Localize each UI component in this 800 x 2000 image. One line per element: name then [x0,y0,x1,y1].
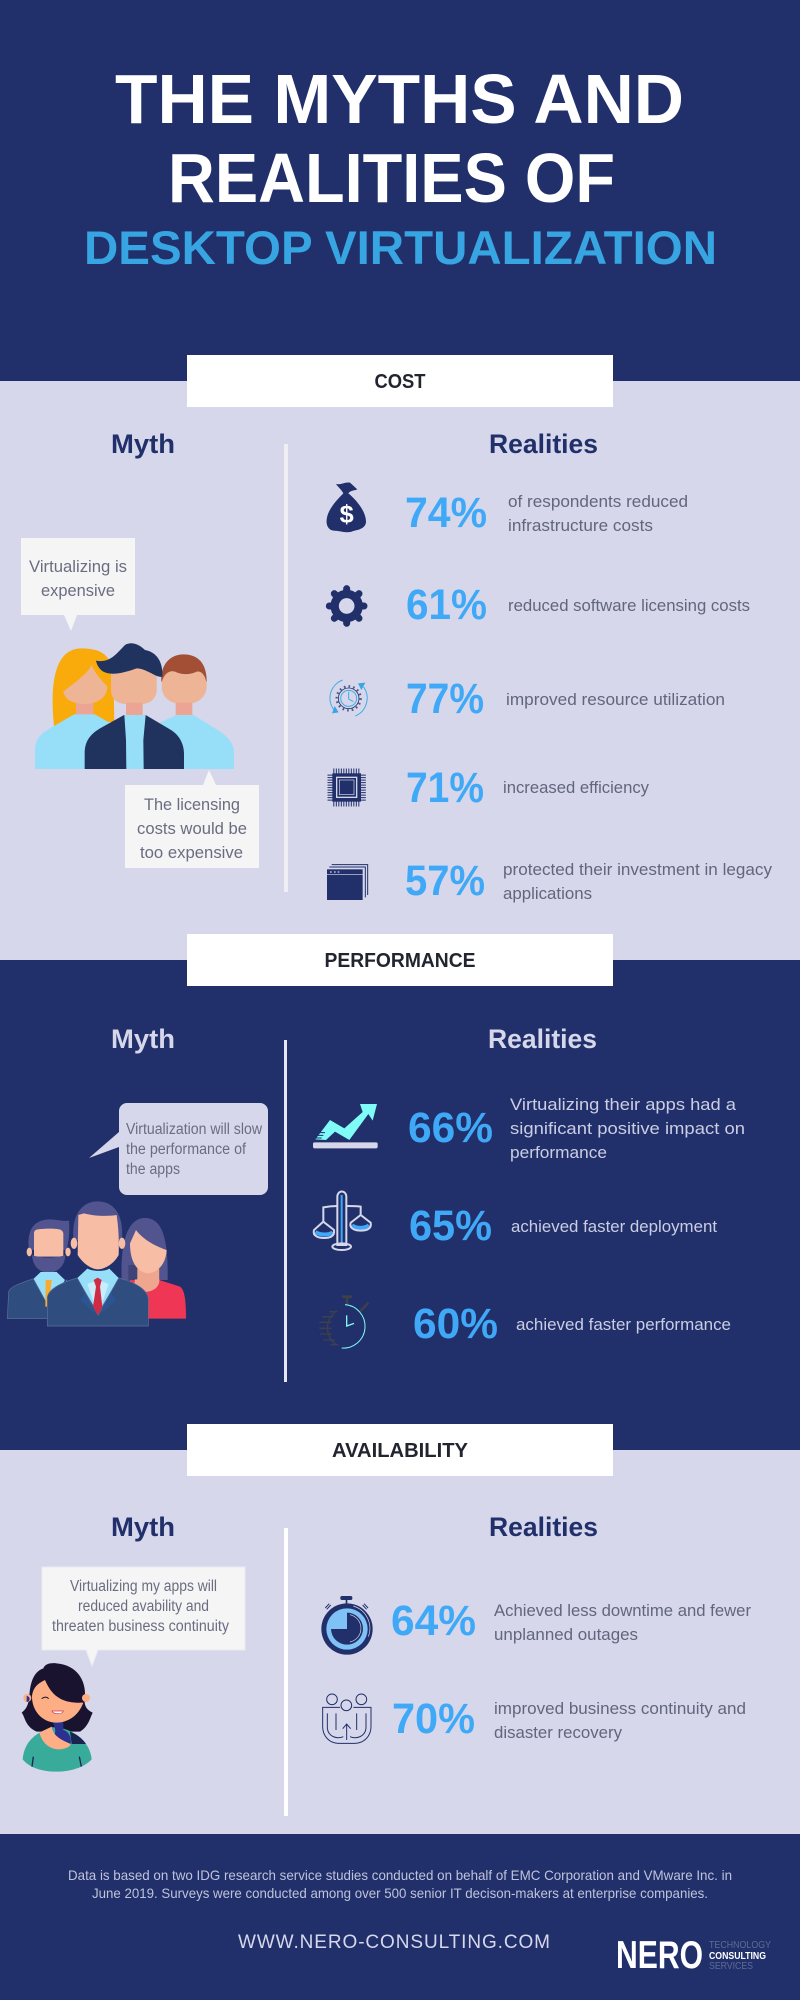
illustration: three colleagues [35,643,234,769]
callout: virtualizing is expensive: Virtualizing is [29,557,127,576]
callout: slow performance: the performance of [126,1141,247,1158]
stat: 77%: 77% [406,675,484,723]
stat: 60% [413,1300,731,1348]
stat: 61% [406,581,750,629]
stat: 70% [392,1695,746,1743]
stat: 66%: significant positive impact on [510,1119,745,1138]
title: DESKTOP VIRTUALIZATION [84,221,717,274]
heading: availability: AVAILABILITY [332,1440,469,1462]
panel: footer [0,1834,800,2000]
stat: 61%: 61% [406,581,487,629]
stat: 61%: reduced software licensing costs [508,596,750,615]
callout: reduced availability [42,1567,245,1666]
stat: 57% [405,857,772,905]
logo: nero: TECHNOLOGY [709,1939,771,1951]
logo: nero: NERO [616,1934,703,1977]
title: REALITIES OF [168,139,615,217]
icon: stopwatch [319,1297,368,1348]
callout: virtualizing is expensive [21,538,135,631]
text: data source note: Data is based on two IDG research service studies conducted on behalf of EMC Corporation and VMware Inc. in [68,1867,732,1883]
callout: slow performance [89,1103,268,1195]
stat: 64%: 64% [391,1597,476,1645]
heading: availability myth: Myth [111,1512,175,1542]
heading: cost realities: Realities [489,429,598,459]
icon: stacked windows [327,865,368,900]
stat: 60%: 60% [413,1300,498,1348]
heading: cost: COST [374,371,426,393]
callout: slow performance: Virtualization will slow [126,1121,263,1138]
icon: gear [329,589,364,623]
stat: 64%: unplanned outages [494,1625,638,1644]
stat: 57%: protected their investment in legacy [503,860,772,879]
heading: cost myth: Myth [111,429,175,459]
stat: 71%: increased efficiency [503,778,649,797]
stat: 57%: 57% [405,857,485,905]
icon: money bag: $ [340,501,354,529]
stat: 66%: performance [510,1143,607,1162]
stat: 70%: 70% [392,1695,475,1743]
text: data source note: June 2019. Surveys were conducted among over 500 senior IT decison-makers at enterprise companies. [92,1885,708,1901]
icon: money bag [327,482,366,532]
stat: 64% [391,1597,751,1645]
heading: availability [187,1424,613,1476]
heading: performance [187,934,613,986]
stat: 77%: improved resource utilization [506,690,725,709]
stat: 74%: 74% [405,489,487,537]
stat: 74%: of respondents reduced [508,492,688,511]
stat: 64%: Achieved less downtime and fewer [494,1601,751,1620]
illustration: smiling woman [22,1663,93,1772]
callout: virtualizing is expensive: expensive [41,581,115,600]
text: website: WWW.NERO-CONSULTING.COM [238,1932,550,1953]
heading: cost [187,355,613,407]
stat: 74% [405,489,688,537]
callout: licensing costs: costs would be [137,819,247,838]
stat: 65%: achieved faster deployment [511,1217,717,1236]
stat: 70%: improved business continuity and [494,1699,746,1718]
stat: 71%: 71% [406,764,484,812]
stat: 65%: 65% [409,1202,492,1250]
logo: nero: SERVICES [709,1960,753,1972]
icon: cpu chip [330,771,363,804]
heading: performance: PERFORMANCE [324,950,476,972]
logo: nero: CONSULTING [709,1950,766,1962]
callout: reduced availability: reduced avability and [78,1598,209,1615]
text: data source note [68,1867,732,1901]
panel: cost [0,355,800,960]
stat: 60%: achieved faster performance [516,1315,731,1334]
heading: performance realities: Realities [488,1024,597,1054]
header panel [0,0,800,381]
stat: 66% [408,1095,745,1162]
stat: 71% [406,764,649,812]
callout: slow performance: the apps [126,1161,180,1178]
panel: availability [0,1424,800,1835]
icon: balance scale [314,1191,371,1250]
title [84,60,717,274]
callout: licensing costs [125,770,259,868]
callout: licensing costs: too expensive [140,843,243,862]
stat: 65% [409,1202,717,1250]
illustration: business team [7,1201,186,1326]
icon: rising chart arrow [313,1104,378,1148]
stat: 77% [406,675,725,723]
heading: performance myth: Myth [111,1024,175,1054]
heading: availability realities: Realities [489,1512,598,1542]
stat: 66%: 66% [408,1104,493,1152]
callout: reduced availability: Virtualizing my apps will [70,1578,217,1595]
stat: 70%: disaster recovery [494,1723,622,1742]
icon: team continuity [323,1694,371,1743]
stat: 66%: Virtualizing their apps had a [510,1095,737,1114]
callout: licensing costs: The licensing [144,795,240,814]
stat: 74%: infrastructure costs [508,516,653,535]
title: THE MYTHS AND [115,60,684,138]
panel: performance [0,934,800,1450]
icon: stopwatch timer [321,1596,373,1655]
icon: gear with clock and cycle arrows [330,680,367,716]
stat: 57%: applications [503,884,592,903]
callout: reduced availability: threaten business continuity [52,1618,229,1635]
